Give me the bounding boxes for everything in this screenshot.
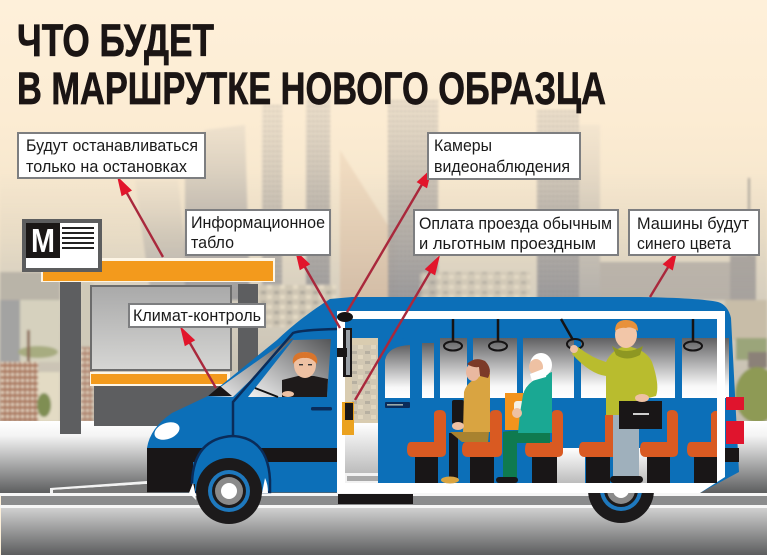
door handle — [311, 407, 332, 410]
arrow: display — [295, 250, 340, 328]
headlight — [152, 419, 182, 443]
bus windows — [385, 338, 729, 398]
bus stop — [22, 219, 275, 434]
front bumper — [147, 448, 193, 492]
callout: stops: Будут останавливаться — [26, 137, 198, 155]
minibus — [147, 297, 744, 524]
arrow: cameras — [347, 168, 432, 312]
background: city skyline — [0, 100, 767, 425]
door window handle — [385, 402, 410, 408]
wheel arch white edge — [189, 478, 268, 500]
front wheel — [196, 458, 262, 524]
white interior frame — [337, 311, 725, 493]
passenger: standing man — [570, 320, 662, 483]
passenger: woman — [441, 359, 490, 484]
arrow: colour — [650, 252, 677, 297]
callout: payment: Оплата проезда обычным — [419, 215, 612, 233]
callout: display: Информационное — [191, 214, 325, 232]
payment terminal — [342, 402, 354, 435]
callout: colour: Машины будут — [637, 215, 749, 233]
callout: display — [186, 210, 330, 255]
callout: stops — [18, 133, 205, 178]
black sill — [338, 494, 413, 504]
callout: cameras: видеонаблюдения — [434, 158, 570, 176]
title — [17, 15, 606, 114]
interior lower panel — [378, 398, 717, 483]
door opening: see-through — [345, 338, 378, 423]
callout: payment: и льготным проездным — [419, 235, 596, 253]
camera — [337, 312, 353, 322]
callout: cameras — [428, 133, 580, 179]
arrow: stops — [117, 176, 163, 257]
black stripe — [147, 448, 337, 462]
seats — [407, 410, 717, 483]
stop: advertising panel — [91, 286, 231, 370]
information display — [337, 328, 352, 377]
door outline — [233, 329, 337, 436]
callout: display: табло — [191, 234, 234, 252]
callout: cameras: Камеры — [434, 137, 492, 155]
callout: payment — [414, 210, 618, 255]
front fender — [192, 436, 270, 492]
wiper vent — [208, 386, 232, 396]
stop: metro sign — [22, 219, 102, 272]
callout: stops: только на остановках — [26, 158, 188, 176]
arrow: payment — [355, 255, 440, 400]
stop: pillar — [60, 282, 81, 434]
title: В МАРШРУТКЕ НОВОГО ОБРАЗЦА — [17, 63, 606, 114]
callout: colour: синего цвета — [637, 235, 732, 253]
background: hazy sky — [0, 0, 767, 425]
rear wheel — [588, 457, 654, 523]
handrails — [444, 319, 702, 350]
windshield — [208, 338, 294, 397]
interior upper panel — [345, 319, 717, 398]
rear lights — [726, 397, 744, 444]
rear bumper — [725, 448, 739, 462]
driver — [255, 352, 328, 397]
stop: dark wall — [94, 386, 234, 426]
stop: metro sign: М — [31, 222, 55, 259]
bus body — [147, 297, 739, 493]
driver window — [248, 339, 331, 397]
stop: roof — [41, 258, 275, 282]
title: ЧТО БУДЕТ — [17, 15, 214, 66]
callout: climate: Климат-контроль — [133, 307, 261, 325]
callout: colour — [629, 210, 759, 255]
floor openings — [557, 448, 585, 483]
road — [0, 421, 767, 555]
arrow: climate — [180, 326, 216, 388]
passenger: old man — [496, 353, 552, 483]
